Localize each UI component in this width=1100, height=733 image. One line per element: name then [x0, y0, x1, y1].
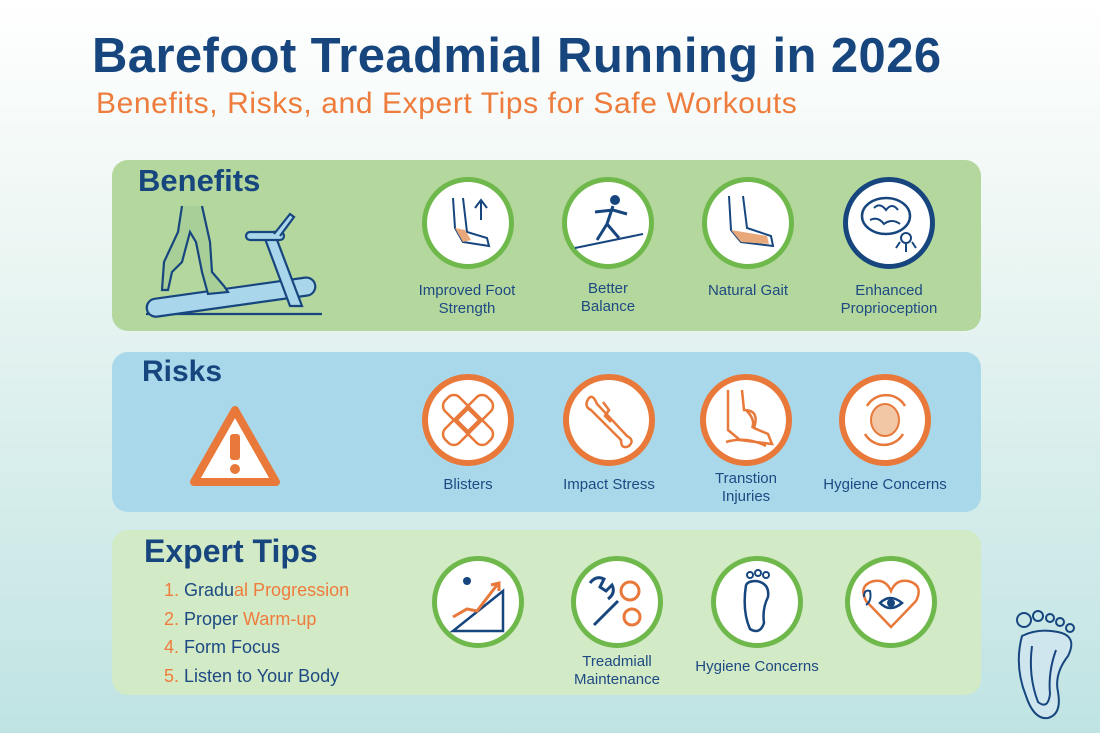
label: Improved Foot Strength — [419, 282, 515, 317]
risk items — [422, 374, 947, 505]
icon: natural gait — [702, 177, 794, 269]
benefit items — [419, 177, 937, 317]
heading: benefits: Benefits — [138, 163, 260, 198]
tips list: 1. Gradual Progression — [164, 580, 349, 600]
icon: hygiene — [839, 374, 931, 466]
heading: expert tips: Expert Tips — [144, 533, 318, 569]
label: Impact Stress — [563, 476, 655, 493]
label: Treadmiall Maintenance — [574, 653, 660, 688]
label: Hygiene Concerns — [695, 658, 819, 675]
title: Barefoot Treadmial Running in 2026 — [92, 29, 942, 83]
label: Hygiene Concerns — [823, 476, 947, 493]
icon: brain — [843, 177, 935, 269]
icon: blisters — [422, 374, 514, 466]
icon: warning triangle — [190, 406, 280, 486]
label: Blisters — [443, 476, 493, 493]
tips list — [164, 580, 349, 686]
subtitle: Benefits, Risks, and Expert Tips for Safe Workouts — [96, 87, 797, 120]
panel: expert tips — [112, 530, 981, 695]
tips list: 4. Form Focus — [164, 637, 280, 657]
tip items — [432, 556, 937, 688]
icon: treadmill runner — [146, 206, 322, 318]
icon: footprint — [1016, 610, 1075, 720]
icon: impact stress — [563, 374, 655, 466]
label: Transtion Injuries — [715, 470, 777, 505]
label: Enhanced Proprioception — [841, 282, 937, 317]
panel: risks — [112, 352, 981, 512]
tips list: 2. Proper Warm-up — [164, 608, 316, 628]
label: Natural Gait — [708, 282, 788, 299]
label: Better Balance — [581, 280, 635, 315]
icon: maintenance — [571, 556, 663, 648]
icon: clean foot — [711, 556, 803, 648]
icon: transition injuries — [700, 374, 792, 466]
icon: gradual progression — [432, 556, 524, 648]
icon: balance — [562, 177, 654, 269]
tips list: 5. Listen to Your Body — [164, 666, 339, 686]
icon: listen heart — [845, 556, 937, 648]
panel: benefits — [112, 160, 981, 331]
heading: risks: Risks — [142, 355, 222, 388]
icon: foot strength — [422, 177, 514, 269]
